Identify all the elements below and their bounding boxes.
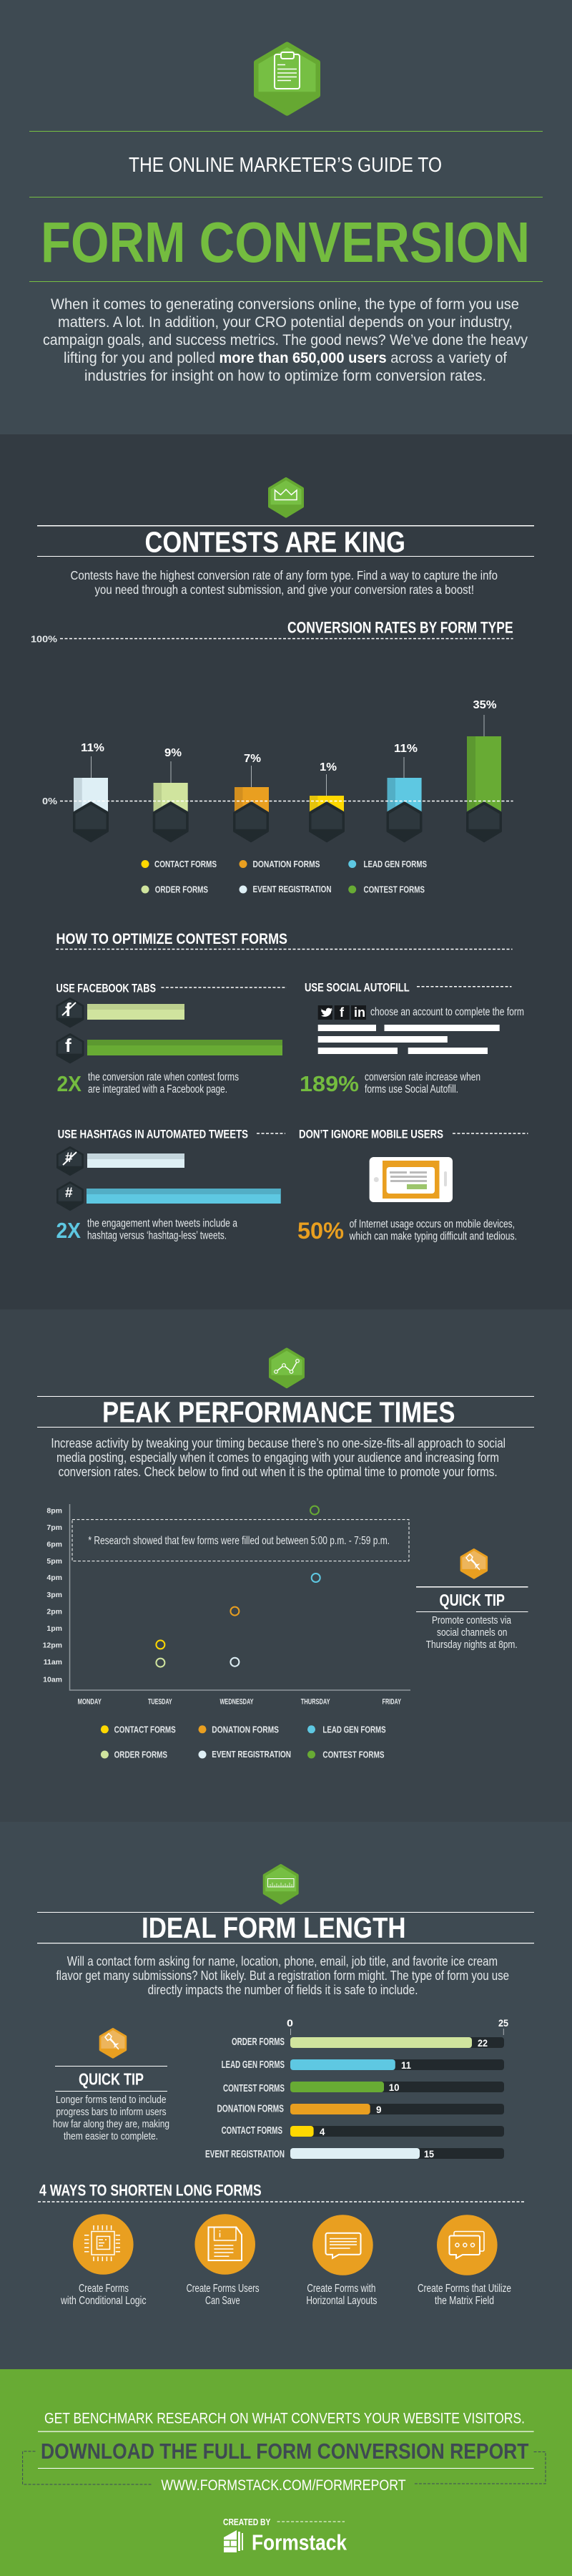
chart: peak times scatter: 1pm [46, 1624, 62, 1633]
bar chart: conversion rates by form type: 0% [42, 796, 57, 806]
text: mobile stat: of Internet usage occurs on mobile devices, [350, 1218, 515, 1231]
bar: event registration 11%: 11% [81, 742, 104, 754]
text: autofill stat: conversion rate increase when [365, 1071, 480, 1083]
stat: 50%: 50% [297, 1218, 344, 1244]
way: horizontal layouts: Horizontal Layouts [306, 2295, 378, 2307]
bar: contest forms 35% [467, 699, 501, 841]
bar: order forms 9% [154, 747, 188, 841]
chart: peak times scatter: TUESDAY [148, 1697, 172, 1706]
text: contests description [70, 568, 498, 597]
chart: peak times scatter: 7pm [46, 1523, 62, 1532]
icon: ruler hexagon [265, 1865, 297, 1903]
form field bars [318, 1025, 500, 1054]
intro paragraph: campaign goals, and success metrics. The good news? We’ve done the heavy [43, 332, 528, 348]
panel: quick tip thursday: social channels on [437, 1627, 507, 1639]
icon: line chart hexagon [270, 1350, 303, 1387]
chart: peak times scatter: 10am [43, 1676, 62, 1684]
heading: peak performance times: PEAK PERFORMANCE TIMES [102, 1395, 455, 1428]
intro paragraph: matters. A lot. In addition, your CRO potential depends on your industry, [58, 314, 513, 331]
text: created by: CREATED BY [223, 2517, 271, 2527]
bar: without facebook [87, 1004, 184, 1020]
panel: quick tip progress bars: them easier to complete. [64, 2130, 158, 2142]
intro paragraph: industries for insight on how to optimize form conversion rates. [84, 368, 486, 384]
legend: form types: DONATION FORMS [212, 1724, 279, 1735]
bar: lead gen forms 11% [388, 743, 422, 841]
tip: use social autofill: USE SOCIAL AUTOFILL [305, 981, 410, 995]
panel: peak performance times [0, 1309, 572, 1822]
panel: quick tip progress bars: QUICK TIP [79, 2069, 144, 2088]
bar: donation forms 7% [235, 753, 269, 841]
text: mobile stat [349, 1218, 517, 1242]
row: contact forms [222, 2125, 504, 2137]
intro paragraph: When it comes to generating conversions online, the type of form you use [51, 296, 519, 313]
heading: 4 ways to shorten long forms: 4 WAYS TO SHORTEN LONG FORMS [39, 2181, 262, 2200]
bar: order forms 9%: 9% [164, 747, 182, 759]
panel: quick tip progress bars: how far along they are, making [53, 2118, 169, 2130]
stat: 2X: 2X [56, 1218, 81, 1243]
chart: peak times scatter: WEDNESDAY [220, 1697, 254, 1706]
panel: quick tip thursday [416, 1550, 528, 1651]
intro paragraph: lifting for you and polled more than 650,000 users across a variety of [64, 350, 507, 366]
way: conditional logic: with Conditional Logic [60, 2295, 147, 2307]
legend: form types: ORDER FORMS [114, 1750, 167, 1760]
bar: lead gen forms 11%: 11% [394, 743, 418, 755]
tip: use facebook tabs [56, 982, 287, 1096]
chart: peak times scatter: MONDAY [78, 1697, 102, 1706]
text: hashtag stat: the engagement when tweets include a [87, 1218, 237, 1229]
text: length description: directly impacts the number of fields it is safe to include. [148, 1983, 418, 1997]
data points [156, 1506, 320, 1667]
bar chart: form fields by type: 25 [498, 2017, 508, 2029]
subtitle: THE ONLINE MARKETER’S GUIDE TO [129, 154, 442, 177]
icon: mobile form [370, 1157, 453, 1202]
icon: social buttons [318, 1005, 366, 1020]
way: matrix field: Create Forms that Utilize [418, 2283, 511, 2295]
row: contest forms: 10 [389, 2082, 400, 2093]
tip: use hashtags in automated tweets [56, 1128, 285, 1243]
text: peak description: media posting, especially when it comes to engaging with your audience and increasing form [56, 1450, 499, 1465]
row: donation forms [217, 2104, 504, 2115]
bar: contact forms 1%: 1% [320, 761, 337, 774]
text: hashtag stat [87, 1218, 237, 1242]
icon: no facebook hexagon: f [65, 999, 72, 1020]
icon: social buttons: f [340, 1005, 345, 1020]
legend: form types: CONTEST FORMS [322, 1750, 385, 1760]
text: choose an account: choose an account to complete the form [370, 1006, 524, 1018]
way: forms users can save: Create Forms Users [187, 2283, 260, 2295]
way: matrix field: the Matrix Field [435, 2295, 494, 2307]
legend: form types: LEAD GEN FORMS [363, 859, 427, 869]
chart: peak times scatter: 12pm [43, 1641, 62, 1650]
chart: peak times scatter: 4pm [46, 1574, 62, 1582]
legend: form types: ORDER FORMS [155, 884, 208, 894]
text: facebook stat: the conversion rate when contest forms [88, 1071, 239, 1083]
text: mobile stat: which can make typing difficult and tedious. [349, 1231, 517, 1242]
row: contact forms: 4 [320, 2126, 325, 2137]
text: peak description: conversion rates. Check below to find out when it is the optimal time to promote your forms. [59, 1465, 498, 1479]
text: facebook stat [88, 1071, 239, 1096]
panel: contests are king [0, 434, 572, 1309]
legend: form types: DONATION FORMS [253, 859, 320, 869]
chart: peak times scatter: FRIDAY [382, 1697, 401, 1706]
way: conditional logic: Create Forms [79, 2283, 129, 2295]
text: peak description [51, 1436, 506, 1479]
legend: form types [101, 1724, 386, 1760]
legend: form types: EVENT REGISTRATION [212, 1750, 291, 1760]
icon: facebook hexagon [57, 1035, 83, 1063]
bar: donation forms 7%: 7% [244, 753, 261, 765]
legend: form types: EVENT REGISTRATION [253, 884, 332, 894]
way: horizontal layouts [306, 2215, 378, 2307]
row: event registration: EVENT REGISTRATION [205, 2149, 285, 2160]
legend: form types: LEAD GEN FORMS [322, 1724, 386, 1735]
bar chart: conversion rates by form type: 100% [31, 634, 57, 644]
text: facebook stat: are integrated with a Facebook page. [88, 1083, 227, 1096]
text: report url: WWW.FORMSTACK.COM/FORMREPORT [161, 2477, 406, 2494]
heading: ideal form length: IDEAL FORM LENGTH [142, 1911, 406, 1944]
callout: research note: * Research showed that few forms were filled out between 5:00 p.m. - 7:59 p.m. [88, 1535, 390, 1547]
legend: form types [142, 859, 427, 894]
icon: hashtag hexagon: # [65, 1186, 73, 1201]
bar chart: conversion rates by form type [31, 618, 513, 841]
text: contests description: Contests have the highest conversion rate of any form type. Find a way to capture the info [70, 568, 498, 582]
bar chart: form fields by type [205, 2017, 508, 2160]
chart: peak times scatter: 3pm [46, 1591, 62, 1599]
stat: 2X: 2X [57, 1071, 82, 1096]
bar: contest forms 35%: 35% [473, 699, 496, 711]
icon: crown hexagon [270, 479, 302, 517]
way: horizontal layouts: Create Forms with [307, 2283, 375, 2295]
chart title: CONVERSION RATES BY FORM TYPE [287, 618, 513, 636]
panel: footer call to action [0, 2369, 572, 2576]
icon: no hashtag hexagon [58, 1147, 82, 1175]
row: lead gen forms: 11 [401, 2059, 411, 2071]
chart: peak times scatter: 8pm [46, 1507, 62, 1516]
stat: 189%: 189% [300, 1071, 359, 1096]
heading: how to optimize contest forms: HOW TO OPTIMIZE CONTEST FORMS [56, 931, 287, 947]
row: contest forms [223, 2082, 504, 2094]
logo: formstack: Formstack [252, 2530, 347, 2555]
way: matrix field [418, 2215, 511, 2307]
tip: use hashtags in automated tweets: USE HASHTAGS IN AUTOMATED TWEETS [58, 1128, 248, 1141]
icon: pin hexagon [461, 1550, 487, 1578]
icon: pin hexagon [100, 2029, 126, 2057]
icon: no hashtag hexagon: # [65, 1151, 73, 1166]
bar: without hashtag [87, 1153, 184, 1168]
icon: social buttons: in [354, 1005, 365, 1020]
row: order forms [232, 2036, 504, 2049]
row: lead gen forms [222, 2059, 504, 2071]
bar chart: form fields by type: 0 [287, 2017, 293, 2029]
callout: research note [72, 1520, 409, 1561]
tip: use social autofill [300, 981, 524, 1096]
chart: peak times scatter [43, 1504, 410, 1706]
row: order forms: 22 [478, 2037, 488, 2049]
legend: form types: CONTACT FORMS [114, 1724, 176, 1735]
intro paragraph [43, 296, 528, 384]
way: conditional logic [60, 2214, 147, 2307]
text: length description [56, 1954, 509, 1997]
decorative bracket [23, 2451, 546, 2484]
legend: form types: CONTACT FORMS [154, 859, 217, 869]
way: forms users can save [187, 2214, 260, 2307]
tip: don't ignore mobile users: DON’T IGNORE MOBILE USERS [299, 1128, 443, 1141]
panel: intro header [0, 0, 572, 434]
tip: use facebook tabs: USE FACEBOOK TABS [56, 982, 156, 995]
icon: no facebook hexagon [57, 999, 83, 1027]
way: forms users can save: Can Save [205, 2295, 240, 2307]
row: donation forms: 9 [376, 2104, 382, 2115]
row: donation forms: DONATION FORMS [217, 2104, 284, 2115]
icon: facebook hexagon: f [65, 1035, 72, 1056]
icon: hashtag hexagon [58, 1182, 82, 1210]
chart: peak times scatter: 2pm [46, 1607, 62, 1616]
row: contact forms: CONTACT FORMS [222, 2125, 282, 2137]
text: autofill stat [365, 1071, 480, 1096]
chart: peak times scatter: THURSDAY [301, 1697, 330, 1706]
row: event registration: 15 [424, 2148, 434, 2160]
icon: clipboard hexagon [257, 44, 317, 113]
bar: contact forms 1% [310, 761, 344, 841]
row: lead gen forms: LEAD GEN FORMS [222, 2059, 285, 2071]
panel: quick tip thursday: Promote contests via [432, 1615, 512, 1626]
bar: event registration 11% [74, 742, 108, 841]
panel: quick tip progress bars: Longer forms tend to include [56, 2094, 167, 2106]
panel: quick tip thursday: QUICK TIP [439, 1591, 505, 1609]
text: length description: Will a contact form asking for name, location, phone, email, job title, and favorite ice cream [67, 1954, 498, 1968]
row: order forms: ORDER FORMS [232, 2036, 285, 2048]
legend: form types: CONTEST FORMS [363, 884, 425, 894]
bar: with facebook [87, 1040, 282, 1055]
panel: ideal form length [0, 1822, 572, 2369]
text: hashtag stat: hashtag versus ‘hashtag-less’ tweets. [87, 1229, 227, 1242]
chart: peak times scatter: 5pm [46, 1557, 62, 1566]
bar: with hashtag [87, 1189, 281, 1204]
panel: quick tip progress bars [53, 2029, 169, 2142]
row: event registration [205, 2148, 504, 2160]
logo: formstack [224, 2530, 347, 2555]
tip: don't ignore mobile users [297, 1128, 528, 1244]
text: autofill stat: forms use Social Autofill. [365, 1083, 458, 1096]
text: contests description: you need through a contest submission, and give your conversion rates a boost! [94, 582, 474, 597]
panel: quick tip thursday: Thursday nights at 8pm. [426, 1639, 518, 1651]
chart: peak times scatter: 11am [44, 1658, 62, 1667]
chart: peak times scatter: 6pm [46, 1540, 62, 1548]
row: contest forms: CONTEST FORMS [223, 2083, 285, 2094]
panel: quick tip progress bars: progress bars to inform users [56, 2106, 166, 2118]
heading: contests are king: CONTESTS ARE KING [144, 525, 405, 558]
